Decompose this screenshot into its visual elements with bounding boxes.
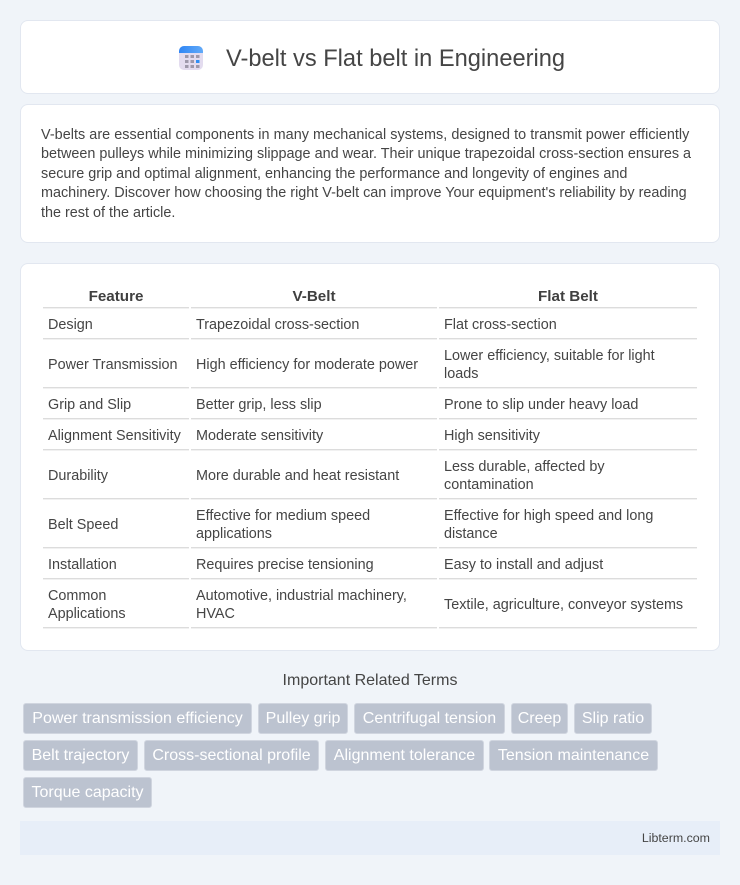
table header: Feature [89, 288, 143, 305]
row: common applications: Textile, agriculture, conveyor systems [444, 597, 683, 613]
panel: comparison table [20, 263, 720, 651]
row: belt speed [48, 508, 653, 542]
footer [20, 821, 720, 855]
row: grip and slip: Better grip, less slip [196, 397, 322, 413]
row: alignment sensitivity: Moderate sensitivity [196, 428, 323, 444]
related term tags: Centrifugal tension [363, 710, 496, 727]
row: durability: Durability [48, 468, 108, 484]
row: alignment sensitivity: High sensitivity [444, 428, 540, 444]
row: common applications: Applications [48, 606, 126, 622]
title: V-belt vs Flat belt in Engineering [226, 46, 565, 72]
row: design: Trapezoidal cross-section [196, 317, 359, 333]
related term tags: Cross-sectional profile [152, 747, 311, 764]
row: design: Flat cross-section [444, 317, 557, 333]
row: common applications [48, 588, 683, 622]
row: power transmission: loads [444, 366, 478, 382]
row: durability: Less durable, affected by [444, 459, 605, 475]
table header [89, 288, 598, 305]
row: durability [48, 459, 605, 493]
related term tags: Power transmission efficiency [32, 710, 243, 727]
panel: introduction: V-belts are essential components in many mechanical systems, designed to transmit power efficiently [41, 127, 689, 143]
row: belt speed: Effective for high speed and long [444, 508, 653, 524]
related term tags: Torque capacity [31, 784, 144, 801]
row: installation: Easy to install and adjust [444, 557, 603, 573]
panel: introduction: machinery. Discover how choosing the right V-belt can improve Your equipment's reliability by reading [41, 185, 687, 201]
row: installation: Installation [48, 557, 117, 573]
heading: related terms: Important Related Terms [283, 672, 457, 689]
row: durability: contamination [444, 477, 534, 493]
row: grip and slip [48, 397, 638, 413]
panel: introduction: secure grip and optimal alignment, enhancing the performance and longevity of engines and [41, 166, 627, 182]
row: belt speed: distance [444, 526, 498, 542]
icon: calendar [179, 46, 203, 70]
related term tags: Slip ratio [582, 710, 644, 727]
row: alignment sensitivity: Alignment Sensitivity [48, 428, 181, 444]
related term tags: Alignment tolerance [334, 747, 475, 764]
row: common applications: Automotive, industrial machinery, [196, 588, 407, 604]
footer source: Libterm.com [642, 831, 710, 845]
panel: header [20, 20, 720, 94]
row: belt speed: Effective for medium speed [196, 508, 370, 524]
panel: introduction: between pulleys while minimizing slippage and wear. Their unique trapezoidal cross-section ensures a [41, 146, 691, 162]
row: design [48, 317, 557, 333]
row: belt speed: applications [196, 526, 272, 542]
row: alignment sensitivity [48, 428, 540, 444]
row: belt speed: Belt Speed [48, 517, 118, 533]
row: installation [48, 557, 604, 573]
panel: introduction: the rest of the article. [41, 205, 175, 221]
row: power transmission: High efficiency for moderate power [196, 357, 418, 373]
table header: Flat Belt [538, 288, 598, 305]
row: power transmission: Lower efficiency, suitable for light [444, 348, 655, 364]
related term tags: Belt trajectory [32, 747, 129, 764]
row: grip and slip: Grip and Slip [48, 397, 131, 413]
related term tags: Pulley grip [266, 710, 340, 727]
panel: introduction [20, 104, 720, 243]
row: common applications: Common [48, 588, 106, 604]
row: power transmission [48, 348, 655, 382]
row: common applications: HVAC [196, 606, 235, 622]
row: power transmission: Power Transmission [48, 357, 178, 373]
row: grip and slip: Prone to slip under heavy load [444, 397, 638, 413]
related term tags [23, 703, 658, 808]
table header: V-Belt [292, 288, 336, 305]
row: durability: More durable and heat resistant [196, 468, 399, 484]
row: installation: Requires precise tensioning [196, 557, 374, 573]
row: design: Design [48, 317, 93, 333]
related term tags: Tension maintenance [498, 747, 649, 764]
related term tags: Creep [518, 710, 561, 727]
